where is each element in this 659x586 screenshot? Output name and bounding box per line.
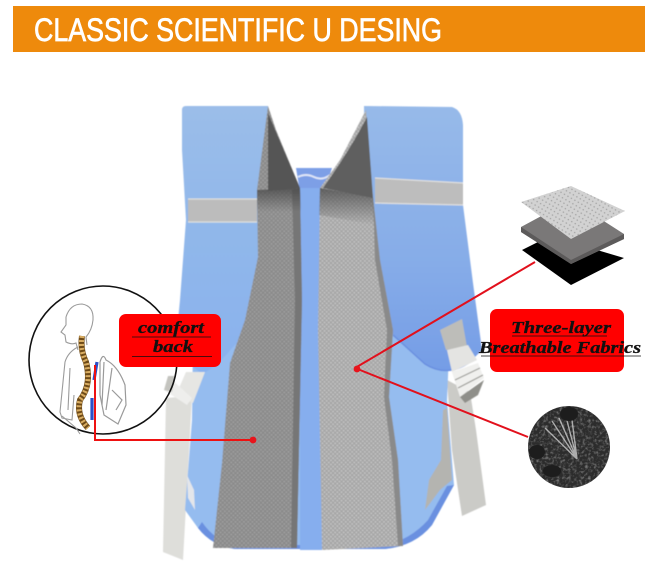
icon: fibre close-up circle [528, 406, 610, 488]
centre channel [300, 188, 322, 550]
spine circle background [29, 286, 177, 434]
banner title: CLASSIC SCIENTIFIC U DESING [34, 12, 442, 48]
backpack [163, 106, 486, 560]
left side pocket tab [187, 475, 195, 510]
left reflective stripe [188, 199, 257, 222]
right strap rim [393, 335, 470, 371]
left mesh edge band [291, 188, 302, 548]
callout lines: three-layer fabric [354, 262, 535, 437]
right webbing strap [447, 380, 486, 516]
left dark strap underside [268, 113, 300, 191]
bottom edge shading [198, 485, 454, 549]
right mesh panel [318, 110, 403, 550]
handle stitching [298, 175, 330, 179]
right side pocket [425, 408, 452, 510]
left shoulder strap [175, 106, 270, 374]
icon: three fabric layers [521, 186, 625, 285]
backpack body [185, 330, 454, 549]
bottom black layer [522, 236, 624, 285]
spine illustration [29, 286, 177, 434]
right buckle [440, 319, 484, 403]
label: three-layer breathable fabrics [478, 309, 641, 372]
spine [79, 336, 88, 428]
label: comfort back: comfort [138, 318, 206, 337]
label: comfort back: back [153, 337, 194, 356]
top mesh layer [521, 186, 625, 239]
right mesh edge band [373, 197, 403, 546]
right dark strap underside [323, 117, 373, 198]
middle grey layer [521, 200, 624, 264]
left mesh panel [213, 106, 302, 548]
left webbing strap [163, 396, 192, 560]
label: three-layer breathable fabrics: Three-layer [511, 318, 611, 337]
label: three-layer breathable fabrics: Breathable Fabrics [478, 338, 641, 357]
left buckle [164, 372, 205, 405]
callout line: comfort back [95, 365, 256, 443]
blue support strip [92, 362, 97, 420]
label: comfort back [119, 314, 221, 367]
small backpack [100, 356, 126, 424]
top handle [296, 168, 332, 192]
right shoulder strap [364, 106, 482, 371]
left mesh top shade [257, 188, 301, 212]
banner [13, 6, 645, 52]
person outline [60, 304, 93, 434]
right mesh top shade [319, 188, 375, 225]
circle outline [29, 286, 177, 434]
right reflective stripe [375, 178, 463, 205]
